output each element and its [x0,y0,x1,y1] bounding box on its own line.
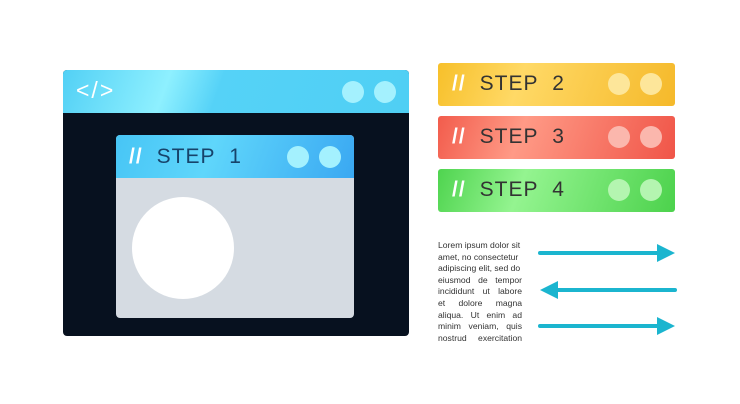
step 3 bar [438,116,675,159]
text block: adipiscing elit, sed do [438,263,520,273]
arrow right 1 [540,244,675,262]
text block: incididunt ut labore [438,286,522,296]
circle placeholder [132,197,234,299]
text block: minim veniam, quis [438,321,522,331]
step 1 header [116,135,354,178]
icon: code brackets: </> [76,77,115,103]
arrow left [540,281,675,299]
text block: Lorem ipsum dolor sit [438,240,520,250]
arrows [538,244,677,335]
arrow right 2 [540,317,675,335]
step 3 bar: // STEP 3 [452,125,565,148]
text block [438,240,522,343]
step 4 bar: // STEP 4 [452,178,565,201]
step 4 bar [438,169,675,212]
text block: amet, no consectetur [438,252,518,262]
panel: outer code window [63,70,409,336]
text block: nostrud exercitation [438,333,522,343]
step 1 header: // STEP 1 [129,145,242,168]
text block: aliqua. Ut enim ad [438,310,522,320]
step 2 bar: // STEP 2 [452,72,565,95]
panel: step 1 inner window [116,135,354,318]
outer window header [63,70,409,113]
outer dots [342,81,396,103]
text block: eiusmod de tempor [438,275,522,285]
step 2 bar [438,63,675,106]
text block: et dolore magna [438,298,522,308]
